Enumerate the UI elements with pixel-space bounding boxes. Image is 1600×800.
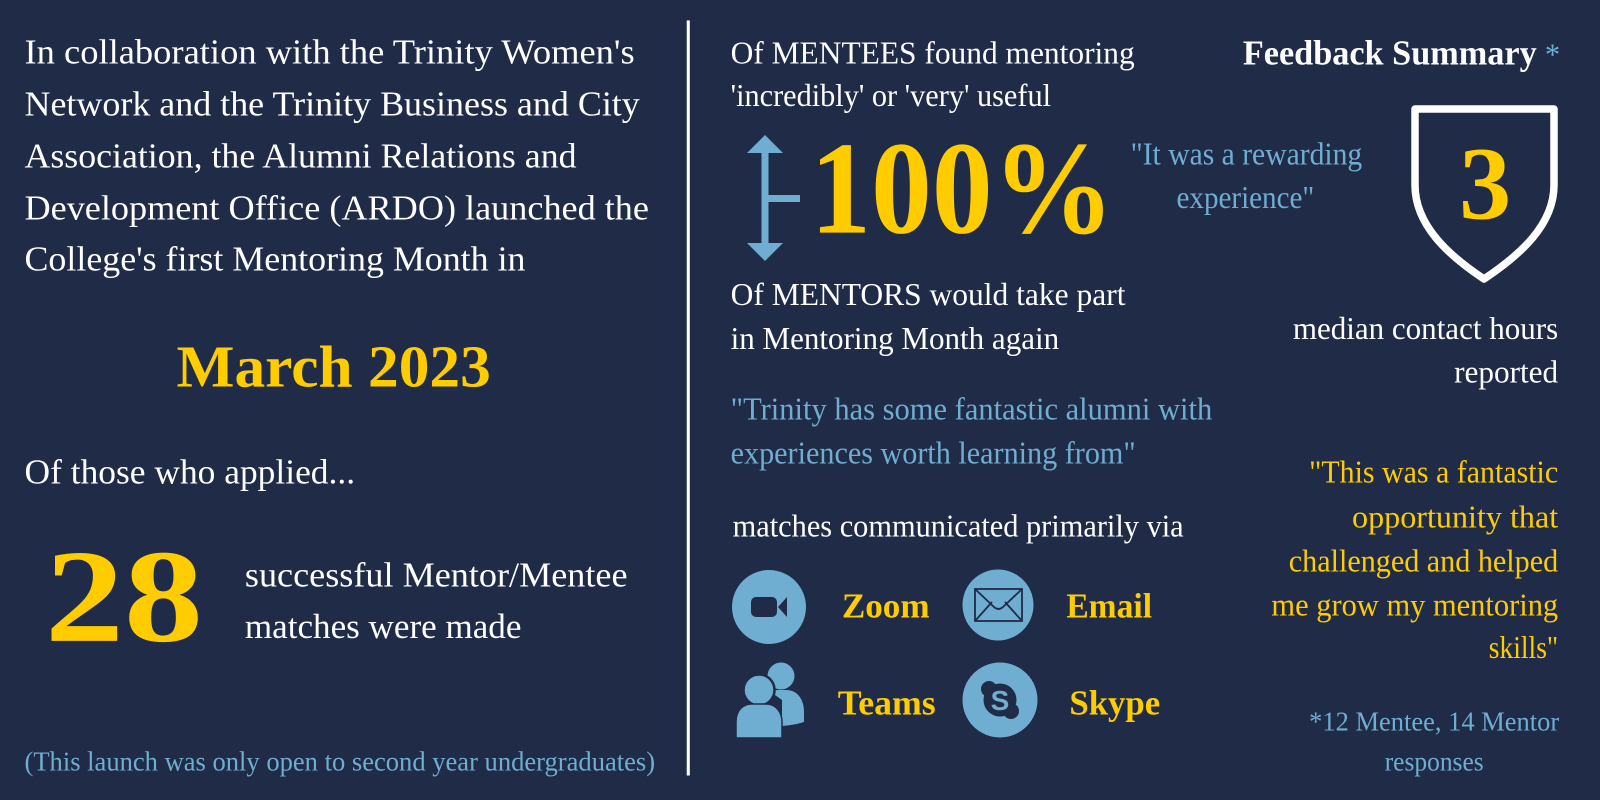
median hours label: reported: [1454, 355, 1558, 390]
communication heading: matches communicated primarily via: [733, 509, 1184, 544]
response count note: responses: [1385, 745, 1484, 776]
label: Skype: Skype: [1069, 683, 1160, 722]
intro text: College's first Mentoring Month in: [24, 239, 526, 278]
quote: fantastic opportunity: [1271, 455, 1558, 665]
quote: fantastic opportunity: me grow my mentoring: [1271, 587, 1558, 622]
big number: 100 percent: 100%: [810, 115, 1114, 262]
heading: feedback summary: *: [1545, 37, 1560, 71]
response count note: [1309, 706, 1559, 776]
heading: launch date: March 2023: [177, 334, 491, 400]
quote: fantastic opportunity: "This was a fantastic: [1309, 455, 1558, 490]
quote: rewarding experience: [1131, 136, 1362, 215]
mentor statement: in Mentoring Month again: [731, 321, 1059, 356]
quote: fantastic alumni: experiences worth learning from": [731, 435, 1136, 470]
quote: rewarding experience: "It was a rewarding: [1131, 136, 1362, 171]
mentor statement: Of MENTORS would take part: [731, 277, 1126, 312]
quote: rewarding experience: experience": [1177, 180, 1314, 215]
quote: fantastic opportunity: opportunity that: [1352, 500, 1558, 535]
icon: skype: [962, 662, 1038, 738]
heading: feedback summary: Feedback Summary: [1243, 33, 1537, 72]
label: Email: Email: [1066, 586, 1152, 625]
panel: feedback summary: [1131, 33, 1560, 776]
icon: teams people: [736, 662, 804, 738]
intro text: Network and the Trinity Business and City: [24, 84, 640, 123]
intro text: Development Office (ARDO) launched the: [24, 188, 649, 227]
applicants lead-in: Of those who applied...: [24, 453, 355, 492]
icon: shield: [1415, 109, 1554, 279]
mentor statement: [731, 277, 1126, 356]
big number: 28 matches: 28: [45, 523, 203, 670]
quote: fantastic alumni: "Trinity has some fantastic alumni with: [731, 391, 1212, 426]
quote: fantastic opportunity: skills": [1489, 630, 1558, 665]
icon: double-headed arrow: [747, 135, 800, 261]
matches description: successful Mentor/Mentee: [245, 556, 628, 595]
mentee statement: 'incredibly' or 'very' useful: [731, 78, 1051, 113]
median hours label: median contact hours: [1293, 311, 1558, 346]
panel: launch overview: [24, 32, 655, 776]
eligibility note: (This launch was only open to second year undergraduates): [24, 745, 655, 776]
icon: email envelope: [962, 570, 1034, 640]
matches description: [245, 556, 628, 646]
response count note: *12 Mentee, 14 Mentor: [1309, 706, 1559, 737]
icon: zoom camera: [732, 570, 806, 644]
intro text: Association, the Alumni Relations and: [24, 136, 577, 175]
matches description: matches were made: [245, 607, 521, 646]
panel: mentee and mentor results: [731, 35, 1212, 738]
big number: median hours: 3: [1459, 125, 1511, 241]
intro text: [24, 32, 649, 278]
icon: skype: S: [991, 685, 1009, 716]
intro text: In collaboration with the Trinity Women's: [24, 32, 635, 71]
mentee statement: Of MENTEES found mentoring: [731, 35, 1135, 70]
label: Teams: Teams: [838, 683, 936, 722]
quote: fantastic opportunity: challenged and helped: [1289, 543, 1558, 578]
mentee statement: [731, 35, 1135, 113]
median hours label: [1293, 311, 1558, 390]
quote: fantastic alumni: [731, 391, 1212, 470]
label: Zoom: Zoom: [842, 586, 930, 625]
